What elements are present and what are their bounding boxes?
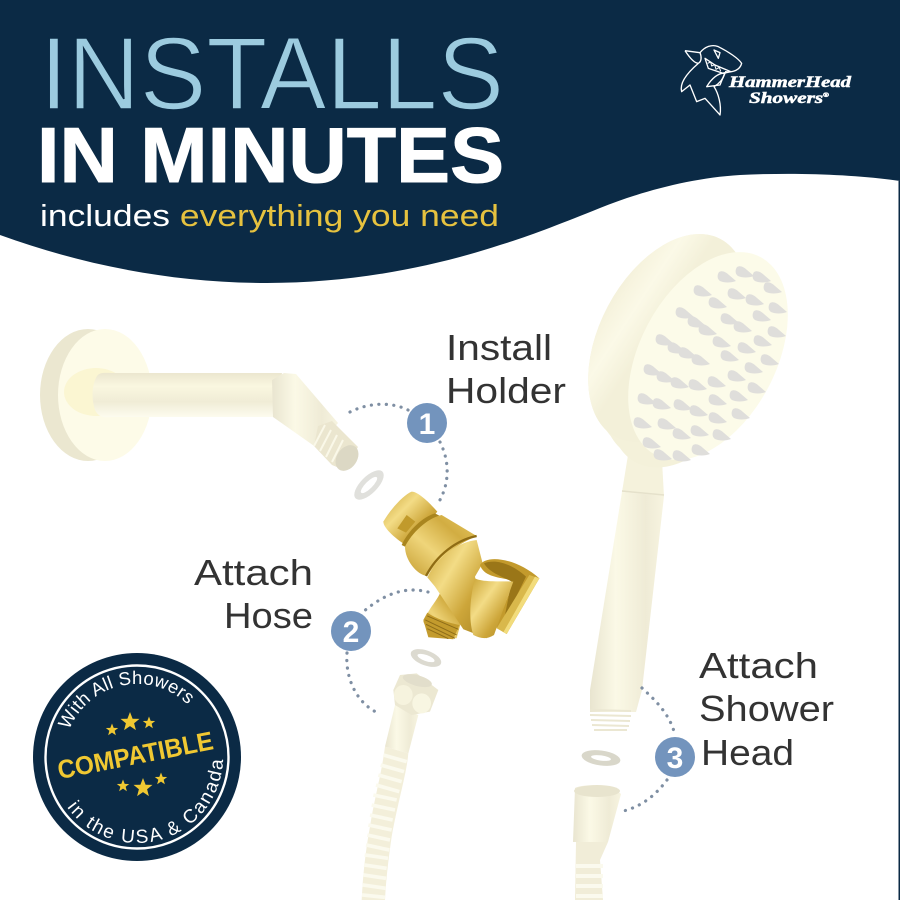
step 1 label: Holder	[446, 370, 566, 411]
head body	[549, 207, 807, 494]
step 1 connector	[350, 404, 447, 505]
hose collar	[385, 705, 418, 753]
hose connector	[573, 785, 621, 900]
spray nozzles	[634, 266, 787, 462]
hose nut	[393, 673, 438, 715]
step 3 label: Attach	[699, 645, 818, 686]
title: INSTALLS	[40, 16, 504, 131]
header banner	[0, 0, 900, 283]
head face	[595, 225, 821, 487]
wall flange	[40, 329, 136, 461]
neck	[622, 455, 664, 497]
middle barrel	[405, 515, 477, 576]
tagline: includes everything you need	[40, 198, 499, 233]
threaded outlet	[423, 593, 461, 638]
step 1 badge: 1	[419, 408, 435, 441]
bottom stars	[117, 772, 167, 796]
logo wordmark: HammerHead	[728, 74, 852, 91]
angled elbow	[272, 373, 338, 448]
top stars	[106, 712, 155, 735]
logo: HammerHead Showers	[681, 46, 852, 115]
lower barrel	[427, 540, 487, 638]
step 3 badge: 3	[667, 742, 683, 775]
neck ring	[402, 513, 440, 550]
step 3 label: Shower	[699, 688, 834, 729]
handle	[590, 492, 664, 712]
step 2 connector	[347, 590, 428, 713]
badge top text: With All Showers	[58, 670, 193, 727]
hose	[362, 672, 438, 900]
icon: shark	[681, 46, 742, 115]
arm tube	[93, 373, 282, 417]
brass holder	[383, 492, 539, 639]
badge heading: COMPATIBLE	[55, 725, 216, 785]
step 2 badge: 2	[343, 616, 359, 649]
title: IN MINUTES	[37, 111, 504, 199]
handle threads	[590, 710, 631, 730]
logo: HammerHead Showers: ®	[823, 92, 830, 99]
logo: HammerHead Showers: Showers	[749, 90, 805, 107]
step 1 badge	[407, 403, 447, 443]
step 3 label: Head	[701, 732, 794, 773]
hex nut	[397, 515, 415, 533]
bracket clip front	[470, 578, 513, 638]
step 2 label: Hose	[224, 595, 313, 636]
step 2 label: Attach	[194, 552, 313, 593]
threads	[314, 421, 358, 470]
step 2 badge	[331, 611, 371, 651]
washer 3	[581, 748, 621, 768]
washer 2	[408, 645, 444, 671]
compatibility badge	[33, 653, 241, 861]
step 3 connector	[619, 688, 675, 812]
title	[37, 16, 504, 199]
bracket lip	[497, 575, 539, 634]
corrugated hose	[362, 747, 408, 900]
badge bottom text: in the USA & Canada	[68, 760, 224, 843]
bracket clip back	[480, 559, 539, 634]
shower arm	[40, 329, 363, 475]
washer 1	[350, 466, 388, 504]
step 1 label: Install	[446, 327, 552, 368]
top collar	[383, 492, 437, 547]
hand shower	[549, 207, 821, 730]
step 3 badge	[655, 737, 695, 777]
